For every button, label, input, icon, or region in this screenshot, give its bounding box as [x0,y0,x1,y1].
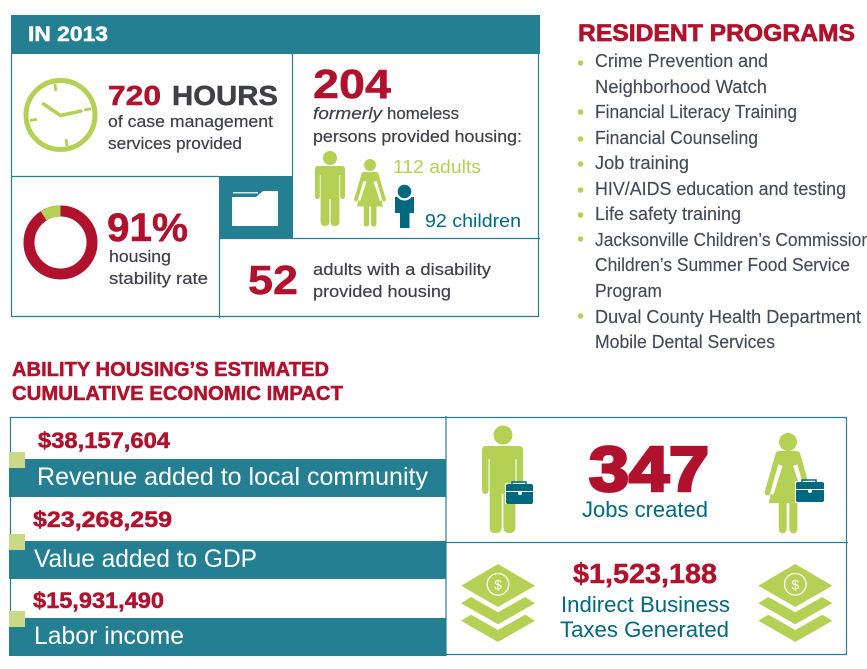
stat: 204 homeless persons: 204 [313,61,391,107]
program list: Duval County Health Department [595,307,861,327]
program list: Life safety training [595,204,741,224]
panel: resident programs [578,20,867,352]
icon: money stack left: $ [494,576,502,592]
stat: indirect business taxes: Indirect Business [561,592,730,617]
row: revenue [9,428,446,497]
program list: Children’s Summer Food Service [595,255,850,275]
stat: 720 hours: HOURS [172,80,278,111]
stat: 52 adults with a disability: 52 [248,257,298,303]
panel: in 2013 [11,15,540,318]
stat: 91% housing stability [107,206,208,288]
row: labor income: $15,931,490 [33,588,164,613]
program list [595,51,867,352]
heading: economic impact: CUMULATIVE ECONOMIC IMPACT [12,383,343,405]
label: 92 children: 92 children [425,211,521,231]
stat: indirect business taxes [560,558,730,642]
icon: money stack left [461,564,535,642]
stat: 204 homeless persons: homeless [387,104,459,123]
row: gdp: $23,268,259 [33,507,172,532]
program list: Financial Literacy Training [595,102,797,122]
program list: Job training [595,153,689,173]
row: gdp [9,507,446,579]
icon: money stack right [758,564,832,642]
stat: 204 homeless persons: persons provided housing: [313,127,522,146]
icon: donut chart 91% [29,211,92,274]
row: revenue: Revenue added to local community [37,463,428,491]
icon: money stack right: $ [791,576,799,592]
panel frame [10,416,848,656]
stat: 720 hours: 720 [108,80,161,111]
program list: Crime Prevention and [595,51,768,71]
label: 112 adults: 112 adults [393,157,481,177]
icon: adult woman [356,159,384,226]
stat: 91% housing stability: 91% [107,206,188,250]
stat: 52 adults with a disability: provided housing [313,282,451,301]
stat: indirect business taxes: Taxes Generated [560,617,729,642]
stat: 52 adults with a disability: adults with a disability [313,260,492,279]
stat: 52 adults with a disability [248,257,492,303]
stat: 204 homeless persons: formerly [313,104,384,123]
stat: 720 hours [108,80,278,153]
heading bar: in 2013: IN 2013 [28,23,108,46]
program list: Financial Counseling [595,128,758,148]
program list: Program [595,281,662,301]
bullets [578,60,583,319]
stat: 204 homeless persons [313,61,522,146]
heading: economic impact: ABILITY HOUSING’S ESTIMATED [12,359,329,381]
row: gdp: Value added to GDP [34,545,257,573]
panel frame [12,54,540,318]
icon: woman with briefcase [767,433,825,533]
program list: HIV/AIDS education and testing [595,179,846,199]
row: revenue: $38,157,604 [38,428,171,453]
program list: Mobile Dental Services [595,332,775,352]
icon: clock [26,80,95,150]
icon: adult man [315,151,345,226]
heading: economic impact [12,359,343,405]
icon: man with briefcase [482,426,534,533]
stat: 347 jobs created [582,435,709,522]
stat: 347 jobs created: Jobs created [582,497,708,522]
stat: 720 hours: services provided [108,134,242,153]
stat: 347 jobs created: 347 [589,435,709,505]
stat: indirect business taxes: $1,523,188 [573,558,717,589]
stat: 91% housing stability: housing [109,247,171,266]
program list: Neighborhood Watch [595,77,767,97]
heading bar: in 2013 [11,15,540,54]
heading: resident programs: RESIDENT PROGRAMS [578,20,855,47]
stat: 720 hours: of case management [108,112,273,131]
icon: folder [219,176,293,238]
row: labor income [9,588,446,656]
icon: child [395,182,414,228]
panel: economic figures [9,416,848,656]
row: labor income: Labor income [34,622,184,650]
stat: 91% housing stability: stability rate [109,269,208,288]
